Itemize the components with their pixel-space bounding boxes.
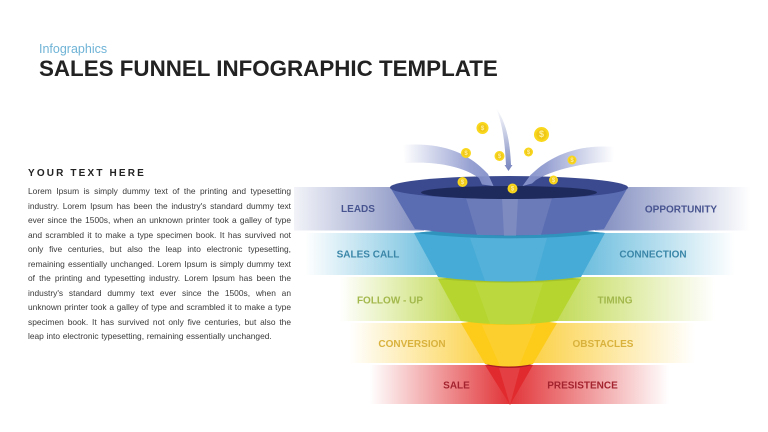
body text block: leap into electronic typesetting, remaining essentially unchanged. bbox=[28, 331, 272, 341]
label: sales call: SALES CALL bbox=[337, 250, 399, 260]
band: sale and presistence bbox=[370, 365, 669, 404]
arrow: top bbox=[496, 108, 512, 171]
body text block bbox=[28, 186, 291, 341]
subtitle: Infographics bbox=[39, 42, 107, 56]
coins: $ bbox=[527, 150, 531, 156]
body text block: of the printing and typesetting industry. Lorem Ipsum has been the bbox=[28, 273, 291, 283]
funnel rim opening bbox=[390, 176, 628, 199]
coins: $ bbox=[461, 180, 465, 186]
label: leads: LEADS bbox=[341, 204, 375, 215]
arrow: right bbox=[522, 147, 614, 186]
label: opportunity: OPPORTUNITY bbox=[645, 204, 717, 216]
body text block: Lorem Ipsum is simply dummy text of the printing and typesetting bbox=[28, 186, 291, 196]
coins: $ bbox=[464, 151, 468, 157]
label: timing: TIMING bbox=[598, 296, 633, 306]
coins: $ bbox=[570, 158, 574, 164]
label: connection: CONNECTION bbox=[619, 250, 687, 260]
label: follow-up: FOLLOW - UP bbox=[357, 296, 423, 306]
coins: $ bbox=[511, 186, 515, 192]
funnel tier: blue bbox=[390, 187, 628, 236]
label: obstacles: OBSTACLES bbox=[573, 339, 634, 350]
body text block: only five centuries, but also the leap into electronic typesetting, bbox=[28, 244, 291, 254]
label: sale: SALE bbox=[443, 380, 470, 392]
label: conversion: CONVERSION bbox=[378, 339, 446, 350]
band: leads and opportunity bbox=[294, 187, 750, 230]
arrow: left bbox=[403, 144, 494, 186]
body text block: ever since the 1500s, when an unknown printer took a galley of type bbox=[28, 215, 291, 225]
band: follow-up and timing bbox=[340, 277, 715, 321]
coins: $ bbox=[539, 129, 544, 139]
funnel tier: yellow bbox=[461, 320, 557, 366]
funnel tier: cyan bbox=[414, 228, 605, 282]
text heading: YOUR TEXT HERE bbox=[28, 168, 146, 179]
funnel tier: green bbox=[438, 274, 581, 324]
label: presistence: PRESISTENCE bbox=[547, 380, 618, 392]
body text block: industry. Lorem Ipsum has been the industry's standard dummy text bbox=[28, 200, 291, 210]
funnel tier: red bbox=[485, 363, 533, 405]
coins: $ bbox=[481, 126, 485, 132]
coins bbox=[458, 122, 576, 194]
coins: $ bbox=[552, 178, 556, 184]
title: SALES FUNNEL INFOGRAPHIC TEMPLATE bbox=[39, 56, 498, 81]
band: sales call and connection bbox=[305, 233, 735, 275]
body text block: industry's standard dummy text ever since the 1500s, when an bbox=[28, 288, 291, 298]
body text block: and scrambled it to make a type specimen book. It has survived not bbox=[28, 230, 291, 240]
body text block: remaining essentially unchanged. Lorem Ipsum is simply dummy text bbox=[28, 258, 291, 268]
band: conversion and obstacles bbox=[350, 323, 695, 363]
coins: $ bbox=[498, 154, 502, 160]
body text block: unknown printer took a galley of type and scrambled it to make a type bbox=[28, 302, 291, 312]
body text block: specimen book. It has survived not only five centuries, but also the bbox=[28, 316, 291, 326]
